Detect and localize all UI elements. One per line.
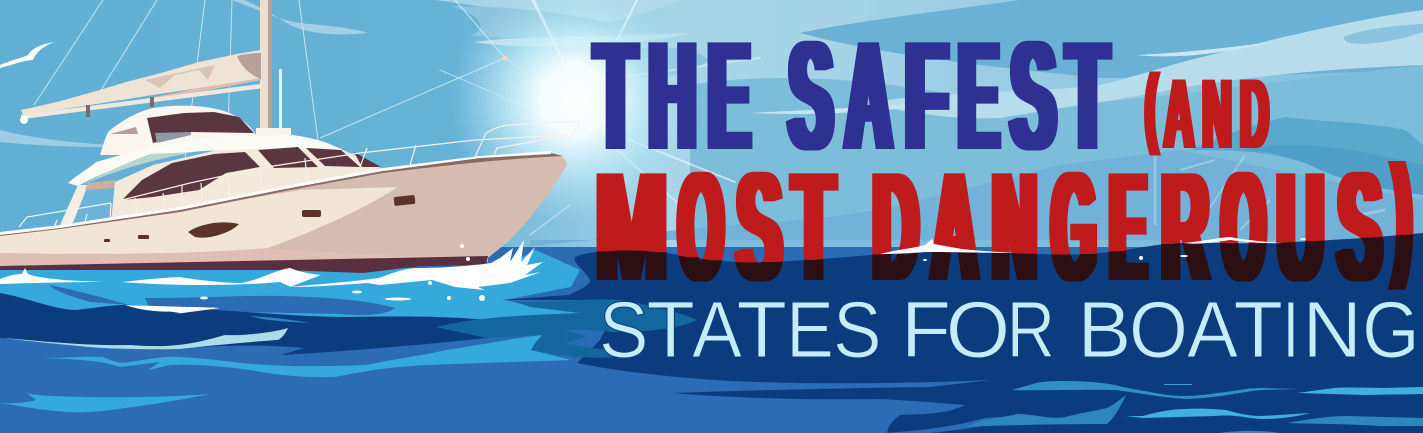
title line 3: STATES FOR BOATING: T xyxy=(646,285,695,374)
deck railings xyxy=(19,121,579,228)
banner illustration and title: T xyxy=(1067,9,1108,182)
main cabin xyxy=(111,140,381,222)
rigging lines xyxy=(34,0,505,200)
title: (AND: A xyxy=(1164,58,1194,169)
title line 3: STATES FOR BOATING: F xyxy=(901,285,951,374)
rear deck posts and view opening xyxy=(60,180,115,225)
clouds xyxy=(0,0,1423,250)
white bow foam xyxy=(0,240,543,313)
sun glow xyxy=(450,0,700,225)
title line 1: THE SAFEST: E xyxy=(708,9,750,182)
title line 3: STATES FOR BOATING: B xyxy=(1078,285,1131,374)
sky xyxy=(0,0,1423,250)
title line 3: STATES FOR BOATING: S xyxy=(833,285,881,374)
title line 2: MOST DANGEROUS): S xyxy=(737,140,782,313)
title line 2: MOST DANGEROUS): R xyxy=(1162,140,1208,313)
title line 3: STATES FOR BOATING: G xyxy=(1362,285,1420,374)
title line 1: THE SAFEST: T xyxy=(595,9,636,182)
title line 3: STATES FOR BOATING: O xyxy=(1129,285,1188,374)
distant island and hills xyxy=(530,117,1423,246)
cabin windows xyxy=(122,147,381,200)
title line 2: MOST DANGEROUS): E xyxy=(1110,140,1146,313)
dark water under title xyxy=(502,233,1423,433)
seagull xyxy=(0,42,54,68)
hull xyxy=(0,151,567,273)
pale glare shards over the hills xyxy=(1155,155,1385,230)
title line 3: STATES FOR BOATING: A xyxy=(692,285,743,374)
title line 2: MOST DANGEROUS): A xyxy=(932,140,978,313)
title line 2: MOST DANGEROUS): T xyxy=(793,140,834,313)
title line 1: THE SAFEST: S xyxy=(789,9,833,182)
foam crests on dark water xyxy=(880,237,1306,261)
banner illustration and title: D xyxy=(1240,58,1269,169)
title line 1: THE SAFEST: A xyxy=(846,9,892,182)
title line 1: THE SAFEST: H xyxy=(649,9,696,182)
sun glare rays xyxy=(440,0,760,235)
title: (AND: N xyxy=(1202,58,1232,169)
title line 3: STATES FOR BOATING: T xyxy=(1234,285,1283,374)
portholes and hull oval xyxy=(104,195,415,242)
distant water streaks xyxy=(885,381,1423,433)
roof deck band xyxy=(68,135,345,187)
title line 3: STATES FOR BOATING: I xyxy=(1282,285,1299,374)
title line 1: THE SAFEST: S xyxy=(1011,9,1056,182)
title line 2: MOST DANGEROUS): O xyxy=(1222,140,1265,313)
title line 2: MOST DANGEROUS): U xyxy=(1277,140,1324,313)
title line 2: MOST DANGEROUS): D xyxy=(873,140,918,313)
title: (AND: ( xyxy=(1145,57,1158,157)
title line 3: STATES FOR BOATING: O xyxy=(946,285,1010,374)
title line 3: STATES FOR BOATING: E xyxy=(786,285,834,374)
title line 2: MOST DANGEROUS): O xyxy=(679,140,723,313)
title line 3: STATES FOR BOATING: N xyxy=(1302,285,1362,374)
mast xyxy=(260,0,508,129)
teal swirls at water edge xyxy=(437,299,697,358)
title line 3: STATES FOR BOATING: T xyxy=(736,285,787,374)
flybridge roof and window xyxy=(100,106,291,155)
furled sail and boom xyxy=(20,50,262,124)
title line 2: MOST DANGEROUS): M xyxy=(596,140,667,313)
yacht xyxy=(0,0,579,273)
title line 2: MOST DANGEROUS): G xyxy=(1052,140,1096,313)
title line 3: STATES FOR BOATING: S xyxy=(599,285,648,374)
title line 3: STATES FOR BOATING: A xyxy=(1187,285,1239,374)
title line 3: STATES FOR BOATING: R xyxy=(1007,285,1055,374)
title line 2: MOST DANGEROUS): N xyxy=(993,140,1036,313)
sea xyxy=(0,247,1423,433)
title line 1: THE SAFEST: E xyxy=(958,9,999,182)
title line 1: THE SAFEST: F xyxy=(905,9,948,182)
